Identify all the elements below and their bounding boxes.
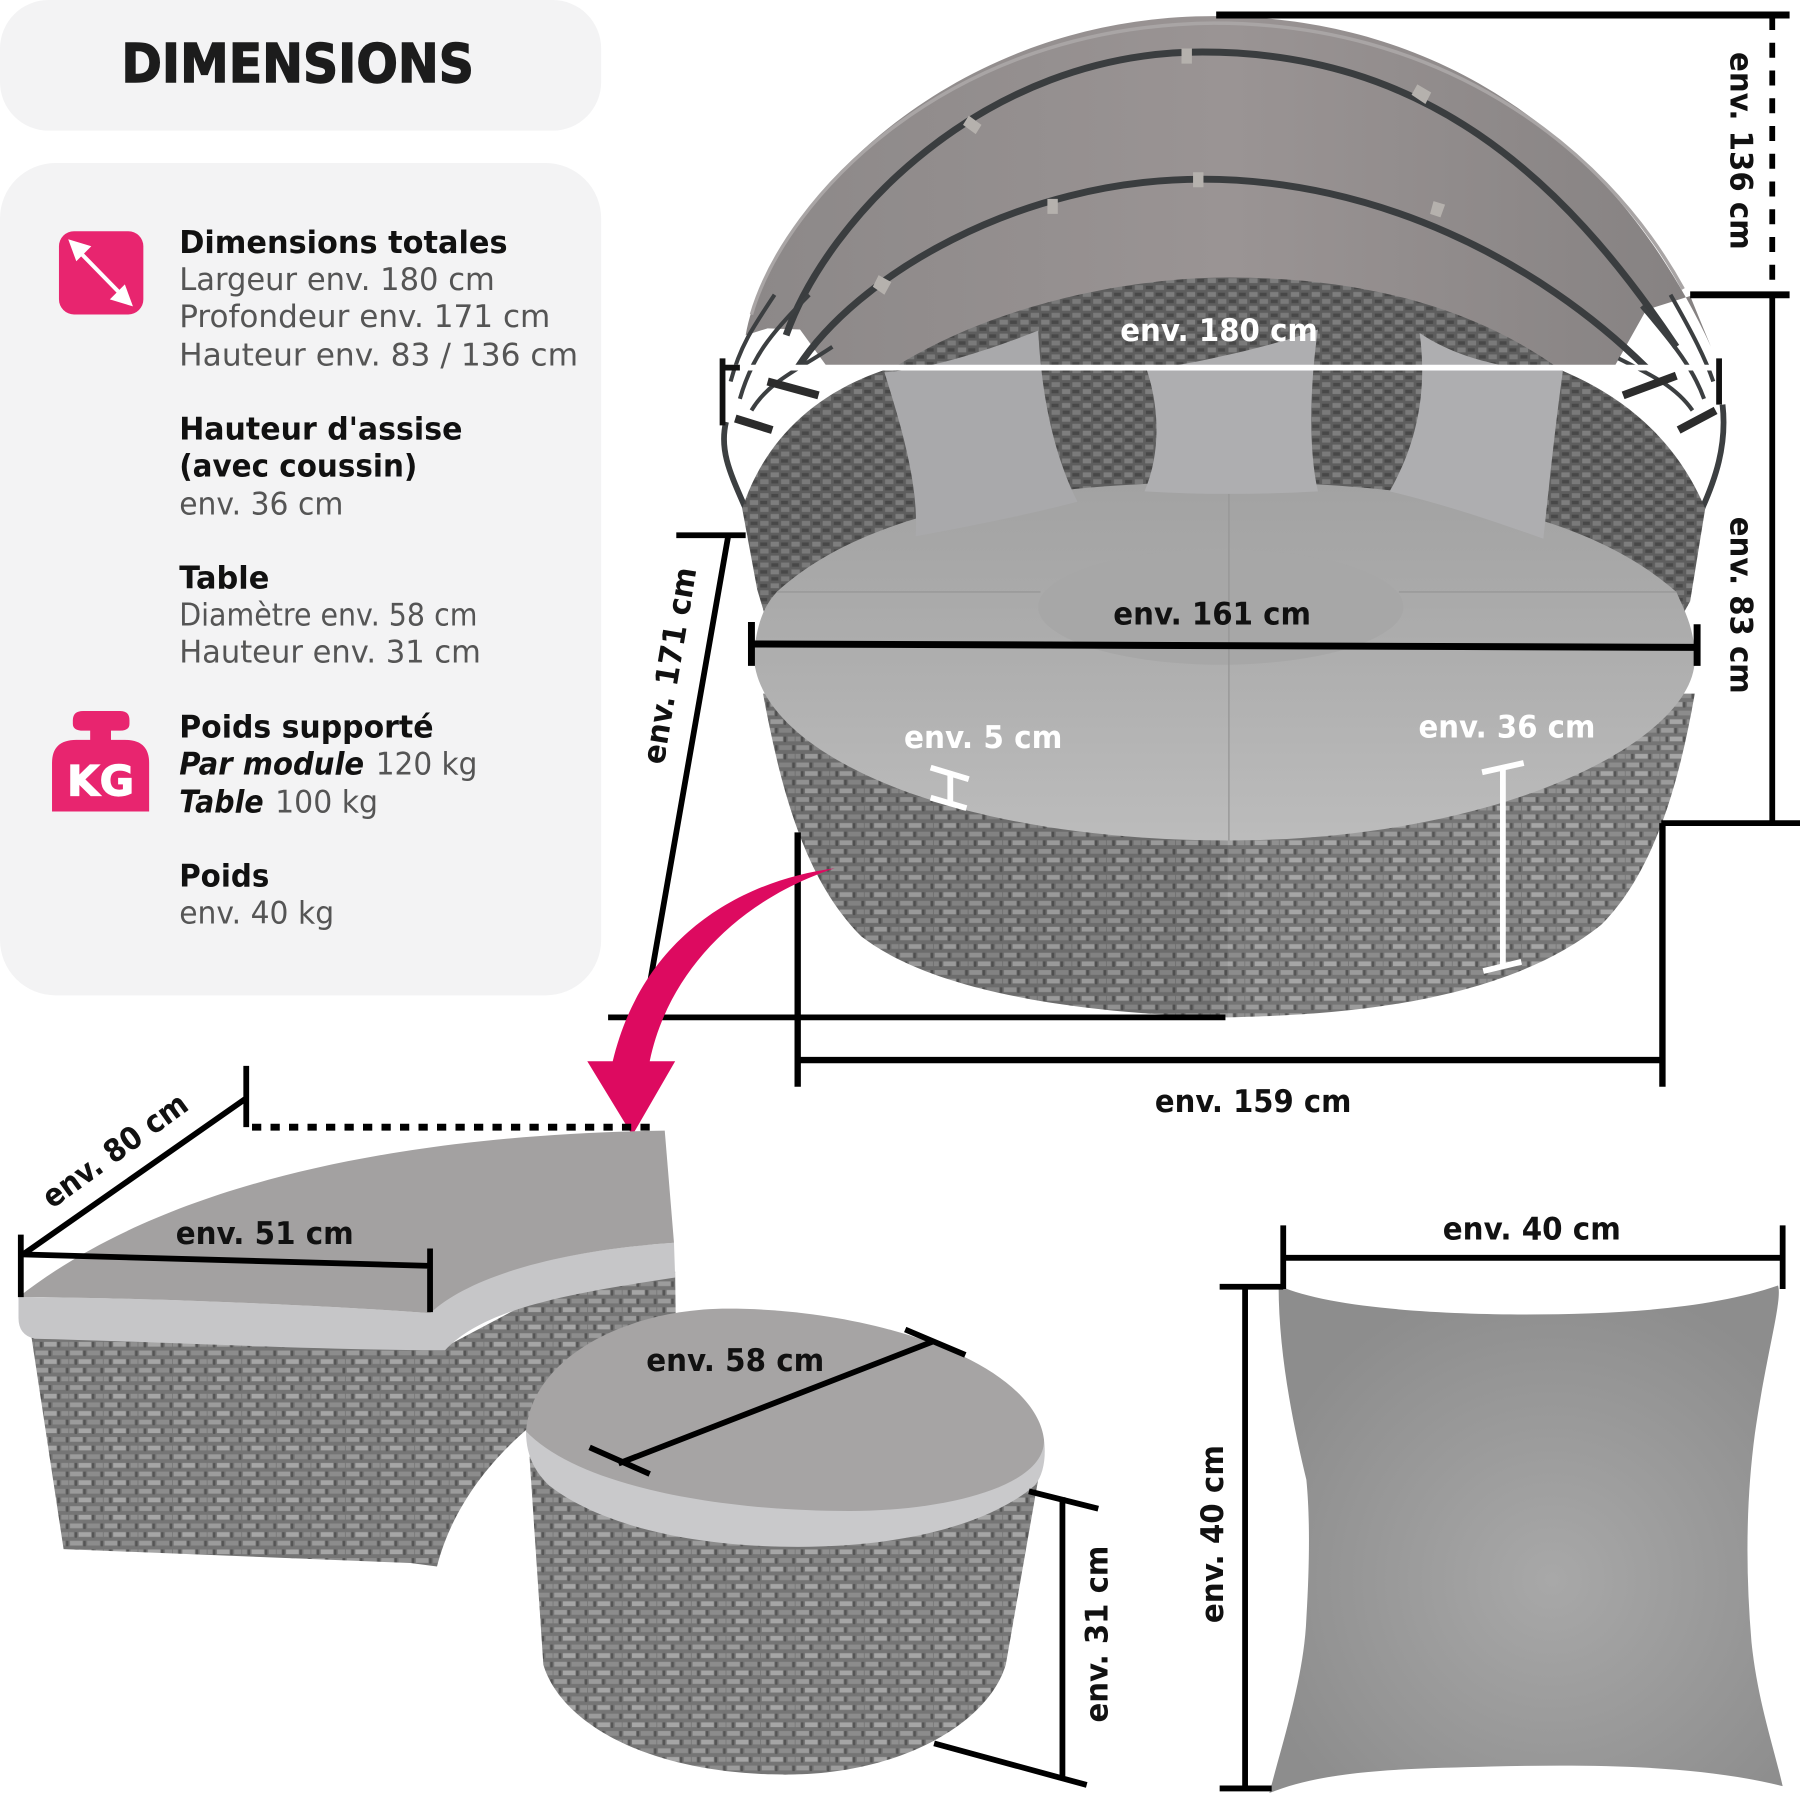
text block: seat height: (avec coussin)	[179, 448, 417, 484]
dimension: 40 cm pillow width: env. 40 cm	[1443, 1211, 1621, 1247]
module top cushion	[18, 1131, 674, 1313]
icon: kg weight	[52, 711, 149, 812]
text block: overall dimensions: Largeur env. 180 cm	[179, 262, 495, 298]
pillow: center	[1145, 329, 1318, 494]
wicker base	[763, 694, 1695, 1017]
dimension: 36 cm seat height	[1418, 710, 1595, 971]
dimension: 83 cm height: env. 83 cm	[1723, 517, 1759, 694]
dimension: 58 cm table: env. 58 cm	[646, 1343, 824, 1379]
seat cushion	[754, 482, 1695, 840]
text block: supported weight: 120 kg	[376, 747, 477, 783]
text block: supported weight	[179, 710, 477, 821]
text block: overall dimensions: Dimensions totales	[179, 225, 508, 261]
panel: specifications	[0, 163, 601, 995]
dimension: 58 cm table	[590, 1329, 965, 1474]
wicker backrest	[742, 277, 1705, 647]
table wicker	[529, 1457, 1038, 1775]
pillow: right	[1390, 333, 1563, 539]
dimension: 161 cm seat: env. 161 cm	[1113, 596, 1311, 632]
module side cushion	[18, 1243, 675, 1350]
dimension: 40 cm pillow height	[1195, 1287, 1283, 1790]
text block: seat height: Hauteur d'assise	[179, 411, 462, 447]
curved seat module	[18, 1131, 676, 1566]
canopy	[746, 16, 1711, 368]
text block: overall dimensions: Hauteur env. 83 / 136 cm	[179, 337, 578, 373]
text block: supported weight: Table	[179, 785, 264, 821]
dimension: 31 cm table: env. 31 cm	[1080, 1546, 1116, 1723]
dimension: 136 cm canopy height	[1216, 15, 1790, 295]
arrow: module callout	[587, 868, 835, 1135]
dimension: 83 cm height	[1661, 295, 1800, 823]
dimension: 5 cm cushion	[904, 720, 1062, 808]
dimension: 161 cm seat	[751, 596, 1697, 666]
frame arms	[724, 295, 1724, 514]
text block: supported weight: Par module	[179, 747, 364, 783]
dimension: 51 cm module	[21, 1216, 430, 1312]
icon: diagonal dimensions arrow	[59, 231, 143, 314]
table top cushion	[526, 1309, 1044, 1511]
text block: weight	[179, 859, 334, 932]
text block: overall dimensions: Profondeur env. 171 cm	[179, 299, 550, 335]
module wicker	[31, 1272, 676, 1566]
text block: overall dimensions	[179, 225, 578, 373]
dimension: 180 cm width	[723, 313, 1719, 425]
text block: supported weight: Poids supporté	[179, 710, 434, 746]
dimension: 180 cm width: env. 180 cm	[1120, 313, 1318, 349]
dimension: 40 cm pillow height: env. 40 cm	[1195, 1445, 1231, 1623]
text block: table: Diamètre env. 58 cm	[179, 597, 477, 633]
text block: seat height: env. 36 cm	[179, 486, 343, 522]
text block: table	[179, 560, 481, 670]
pillow: left	[884, 331, 1077, 536]
dimension: 5 cm cushion: env. 5 cm	[904, 720, 1062, 756]
daybed illustration	[723, 16, 1724, 1017]
text block: weight: env. 40 kg	[179, 896, 334, 932]
dimension: 136 cm canopy height: env. 136 cm	[1723, 52, 1759, 250]
text block: weight: Poids	[179, 859, 269, 895]
base shadow	[763, 694, 1228, 1017]
dimension: 51 cm module: env. 51 cm	[176, 1216, 354, 1252]
dimension: 31 cm table	[934, 1491, 1116, 1785]
dimension: 40 cm pillow width	[1283, 1211, 1783, 1289]
table side cushion	[526, 1431, 1045, 1547]
dimension: 80 cm module: env. 80 cm	[36, 1086, 195, 1216]
text block: seat height	[179, 411, 462, 522]
dimension: 159 cm base: env. 159 cm	[1155, 1084, 1351, 1120]
text block: table: Hauteur env. 31 cm	[179, 634, 481, 670]
dimension: 36 cm seat height: env. 36 cm	[1418, 710, 1595, 746]
dimension: 159 cm base	[798, 823, 1662, 1120]
dimension: 80 cm module	[21, 1066, 657, 1297]
dimension: 171 cm depth: env. 171 cm	[636, 565, 704, 767]
loose pillow	[1269, 1286, 1783, 1793]
text block: supported weight: 100 kg	[275, 785, 378, 821]
title: DIMENSIONS	[121, 33, 474, 95]
round table	[526, 1309, 1045, 1775]
icon: kg weight: KG	[67, 756, 134, 805]
text block: table: Table	[179, 560, 269, 596]
dimension: 171 cm depth	[608, 535, 1225, 1017]
title panel	[0, 0, 601, 131]
